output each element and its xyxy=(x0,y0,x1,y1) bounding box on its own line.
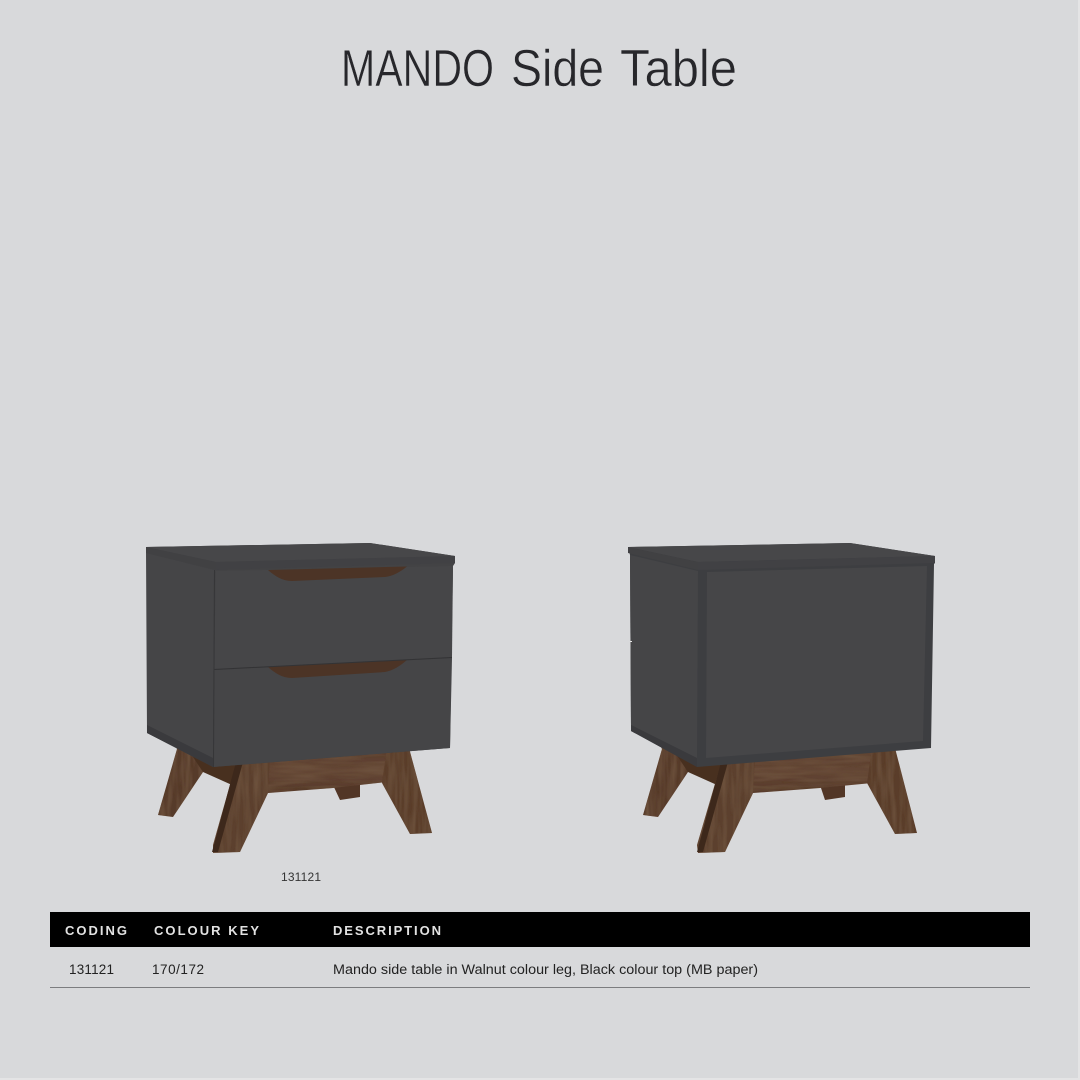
back-right leg xyxy=(333,784,360,800)
tabletop left edge xyxy=(146,547,216,570)
product image: side table front view xyxy=(146,543,455,853)
tabletop back edge xyxy=(698,556,935,570)
cell: colour key value: 170/172 xyxy=(152,962,204,977)
title: Table xyxy=(620,40,737,98)
front rail xyxy=(753,748,872,793)
cabinet side panel xyxy=(147,553,214,758)
cabinet side bottom edge xyxy=(147,725,213,767)
top drawer handle xyxy=(268,566,407,581)
cabinet side panel xyxy=(630,555,698,760)
front-right leg xyxy=(867,748,917,834)
front-left leg xyxy=(213,758,270,853)
specification table xyxy=(50,912,1030,988)
tabletop left edge xyxy=(628,547,698,570)
title: Side xyxy=(511,40,604,98)
front-left leg shaded face xyxy=(212,762,243,852)
cabinet silhouette xyxy=(146,543,455,767)
drawer gap mark xyxy=(630,641,632,642)
bottom drawer handle xyxy=(268,660,407,678)
front-left leg xyxy=(697,758,755,853)
table header bar xyxy=(50,912,1030,947)
top drawer xyxy=(214,566,453,669)
back-left leg xyxy=(643,735,690,817)
header: coding: CODING xyxy=(65,923,127,938)
product code caption: 131121 xyxy=(281,870,321,884)
side rail xyxy=(185,745,240,785)
tabletop surface xyxy=(628,543,935,562)
tabletop surface xyxy=(146,543,455,562)
cabinet side bottom edge xyxy=(631,725,697,767)
cabinet silhouette xyxy=(628,543,935,767)
header: description: DESCRIPTION xyxy=(333,923,441,938)
back panel xyxy=(706,566,927,758)
title: MANDO xyxy=(341,40,494,98)
tabletop front edge xyxy=(216,556,455,570)
cell: description value: Mando side table in Walnut colour leg, Black colour top (MB paper) xyxy=(333,962,758,977)
drawer gap line xyxy=(214,657,452,670)
side and drawer seam xyxy=(213,570,215,767)
bottom drawer xyxy=(213,658,452,767)
front rail xyxy=(268,748,387,793)
back-right leg xyxy=(820,784,845,800)
product image: side table back view xyxy=(628,543,935,853)
cell: coding value: 131121 xyxy=(69,962,114,977)
back-left leg xyxy=(158,735,205,817)
header: colour key: COLOUR KEY xyxy=(154,923,259,938)
title xyxy=(341,40,737,98)
front-left leg shaded face xyxy=(697,762,728,852)
front-right leg xyxy=(382,748,432,834)
side rail xyxy=(670,745,725,785)
